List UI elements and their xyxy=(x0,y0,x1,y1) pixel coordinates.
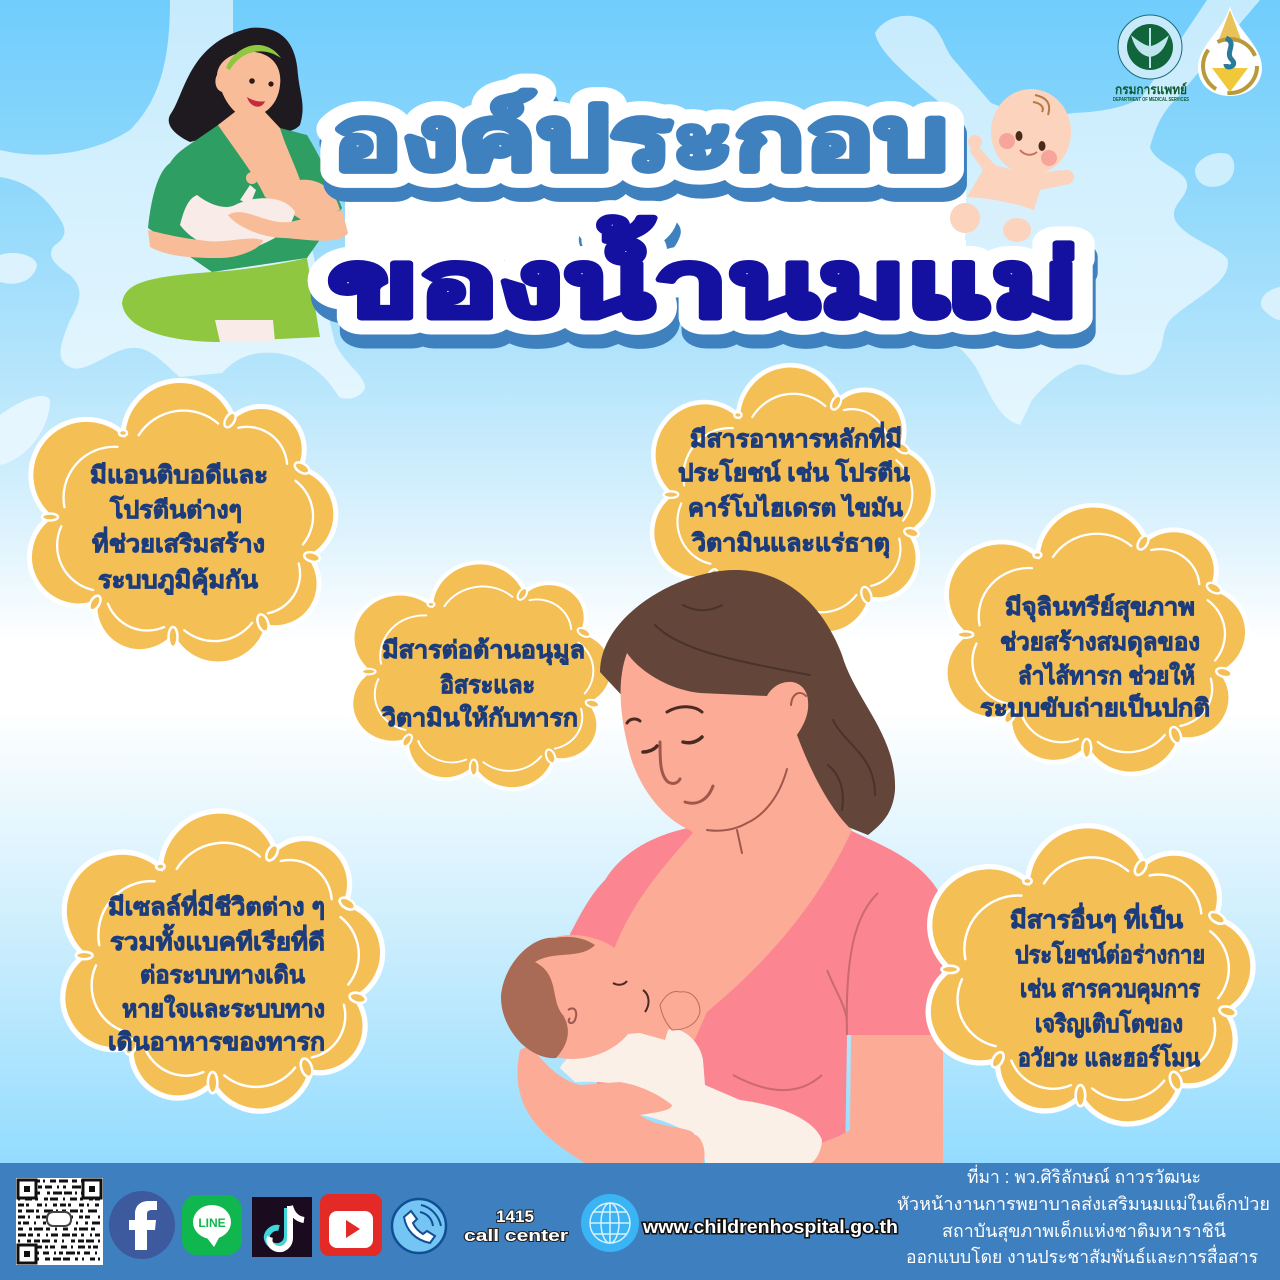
logo: department of medical services: กรมการแพทย์ xyxy=(1115,82,1187,97)
illustration: mother breastfeeding (top left) xyxy=(122,28,348,342)
panel: living cells: เดินอาหารของทารก xyxy=(108,1029,325,1056)
icon: facebook xyxy=(109,1191,175,1259)
icon: tiktok xyxy=(252,1197,312,1257)
panel: living cells: ต่อระบบทางเดิน xyxy=(140,962,306,989)
baby's hand xyxy=(660,992,700,1030)
panel: nutrients xyxy=(652,365,933,634)
shirt creases xyxy=(733,893,878,1090)
baby's head xyxy=(502,935,642,1059)
footer bar xyxy=(0,1163,1280,1280)
panel: antibodies: ระบบภูมิคุ้มกัน xyxy=(98,567,259,596)
mother's face xyxy=(621,653,852,860)
panel: antibodies: โปรตีนต่างๆ xyxy=(109,495,242,524)
panel: probiotics: ลำไส้ทารก ช่วยให้ xyxy=(1018,661,1195,690)
panel: probiotics: มีจุลินทรีย์สุขภาพ xyxy=(1005,593,1195,623)
mother's hair xyxy=(600,570,895,835)
panel: antibodies xyxy=(29,381,336,664)
baby's body xyxy=(560,1029,822,1163)
source credits xyxy=(897,1164,1270,1267)
title xyxy=(328,89,1079,336)
title: ของน้ำนมแม่ xyxy=(328,217,1079,336)
source credits: ออกแบบโดย งานประชาสัมพันธ์และการสื่อสาร xyxy=(906,1244,1258,1267)
illustration: mother nursing baby (center) xyxy=(501,570,944,1163)
panel: other substances: เช่น สารควบคุมการ xyxy=(1020,976,1200,1005)
panel: probiotics: ระบบขับถ่ายเป็นปกติ xyxy=(980,693,1210,722)
icon: globe xyxy=(581,1194,639,1252)
icon: line: LINE xyxy=(198,1216,226,1230)
logo: institute emblem xyxy=(1198,6,1262,96)
call center text: call center xyxy=(464,1226,568,1245)
source credits: สถาบันสุขภาพเด็กแห่งชาติมหาราชินี xyxy=(942,1219,1226,1242)
panel: other substances: อวัยวะ และฮอร์โมน xyxy=(1018,1043,1201,1072)
panel: other substances: มีสารอื่นๆ ที่เป็น xyxy=(1010,902,1184,934)
panel: other substances xyxy=(928,826,1253,1124)
title backing xyxy=(345,175,966,260)
mother's right arm xyxy=(760,1035,943,1163)
icon: youtube xyxy=(320,1194,382,1256)
panel: nutrients: วิตามินและแร่ธาตุ xyxy=(691,530,890,559)
illustration: baby (top right) xyxy=(950,89,1074,242)
website: www.childrenhospital.go.th xyxy=(642,1217,898,1237)
panel: antioxidants: วิตามินให้กับทารก xyxy=(381,703,578,732)
mother's shirt xyxy=(570,827,944,1163)
QR code xyxy=(16,1178,103,1265)
panel: antioxidants: มีสารต่อต้านอนุมูล xyxy=(382,637,585,666)
call center text xyxy=(464,1207,568,1245)
title: องค์ประกอบ xyxy=(332,89,948,188)
panel: other substances: ประโยชน์ต่อร่างกาย xyxy=(1015,940,1205,969)
panel: antioxidants: อิสระและ xyxy=(440,672,535,699)
mother's features xyxy=(627,605,875,853)
panel: living cells: มีเซลล์ที่มีชีวิตต่าง ๆ xyxy=(108,889,325,921)
panel: antibodies: มีแอนติบอดีและ xyxy=(90,462,268,489)
panel: other substances: เจริญเติบโตของ xyxy=(1035,1009,1183,1038)
mother's left arm xyxy=(518,1045,705,1163)
panel: antioxidants xyxy=(351,562,613,789)
icon: line xyxy=(182,1195,242,1255)
panel: nutrients: คาร์โบไฮเดรต ไขมัน xyxy=(688,493,904,522)
logo: department of medical services: DEPARTMENT OF MEDICAL SERVICES xyxy=(1113,97,1190,103)
logo: department of medical services xyxy=(1113,15,1190,103)
panel: living cells: รวมทั้งแบคทีเรียที่ดี xyxy=(110,923,325,956)
panel: nutrients: มีสารอาหารหลักที่มี xyxy=(690,421,902,453)
call center text: 1415 xyxy=(496,1207,534,1226)
source credits: ที่มา : พว.ศิริลักษณ์ ถาวรวัฒนะ xyxy=(967,1164,1201,1187)
panel: nutrients: ประโยชน์ เช่น โปรตีน xyxy=(678,458,911,487)
panel: probiotics xyxy=(945,505,1247,774)
panel: probiotics: ช่วยสร้างสมดุลของ xyxy=(1000,629,1200,658)
mother's chest xyxy=(600,828,852,1050)
source credits: หัวหน้างานการพยาบาลส่งเสริมนมแม่ในเด็กป่วย xyxy=(897,1192,1270,1214)
panel: living cells: หายใจและระบบทาง xyxy=(122,994,325,1023)
icon: phone xyxy=(392,1199,446,1253)
panel: living cells xyxy=(63,811,383,1111)
panel: antibodies: ที่ช่วยเสริมสร้าง xyxy=(92,526,265,558)
